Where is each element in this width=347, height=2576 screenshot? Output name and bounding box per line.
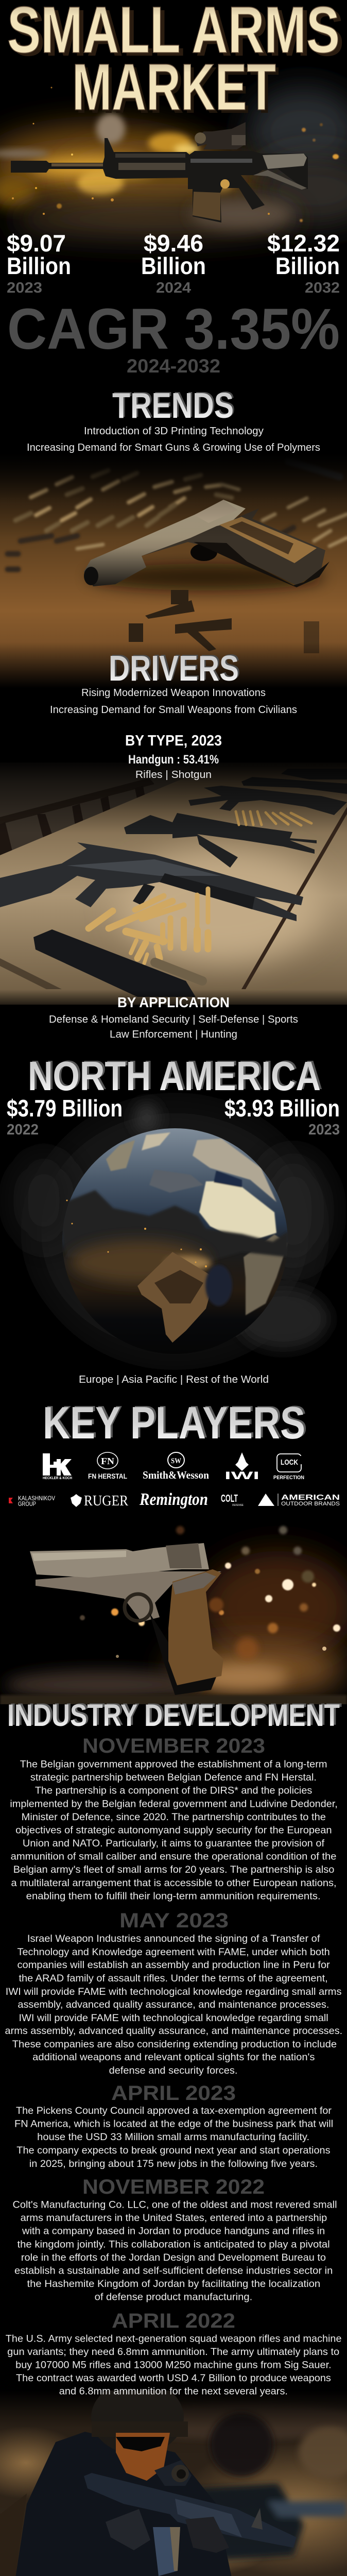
paragraph: implemented by the Belgian federal government and Ludivine Dedonder, — [10, 1798, 338, 1809]
by type scene: firearms on wooden table — [0, 757, 347, 1010]
April 2022 paragraph: buy 107000 M5 rifles and 13000 M250 machine guns from Sig Sauer. — [15, 2360, 332, 2371]
smoke backdrop — [13, 1103, 329, 1360]
development: May 2023: MAY 2023 — [119, 1909, 229, 1932]
paragraph: arms assembly, advanced quality assurance, and maintenance processes. — [5, 2025, 342, 2037]
sparks and bokeh — [12, 87, 339, 222]
far cartridges — [236, 811, 311, 825]
logo: Ruger: RUGER — [84, 1493, 128, 1509]
development: November 2023 — [10, 1735, 338, 1902]
warm glow and smoke — [0, 1551, 347, 1705]
title: MARKET — [72, 50, 276, 124]
smoke and fire glow — [0, 88, 347, 237]
paragraph: in 2025, bringing about 175 new jobs in the following five years. — [29, 2158, 318, 2170]
other regions: Europe | Asia Pacific | Rest of the World — [79, 1374, 269, 1385]
market size stat: 2024: Billion — [141, 252, 206, 279]
logo: Glock: LOCK — [281, 1458, 298, 1467]
heading: drivers: DRIVERS — [110, 647, 240, 687]
hero scene: rifle with muzzle blast — [0, 87, 347, 237]
by application block: Defense & Homeland Security | Self-Defense | Sports — [49, 1014, 298, 1025]
CAGR figure: 2024-2032 — [127, 355, 220, 377]
logo: IWI — [224, 1452, 259, 1482]
paragraph: of defense product manufacturing. — [95, 2292, 252, 2303]
paragraph: The partnership is a component of the DIRS* and the policies — [35, 1785, 313, 1797]
development: April 2023 — [14, 2082, 333, 2170]
paragraph: the ARAD family of assault rifles. Under the terms of the agreement, — [19, 1973, 328, 1984]
paragraph: Colt's Manufacturing Co. LLC, one of the oldest and most revered small — [12, 2199, 337, 2210]
logo: Smith and Wesson: SW — [171, 1457, 181, 1465]
paragraph: strategic partnership between Belgian Defence and FN Herstal. — [30, 1772, 317, 1783]
paragraph: Union and NATO. Particularly, it aims to guarantee the provision of — [23, 1838, 325, 1849]
April 2022 paragraph: The U.S. Army selected next-generation squad weapon rifles and machine — [6, 2333, 342, 2344]
embers — [66, 1199, 207, 1267]
logo: Glock — [273, 1454, 304, 1481]
pistol and sparks scene — [0, 1526, 347, 1705]
by application block — [0, 994, 347, 1046]
regional value 2022: 2022 — [7, 1122, 39, 1138]
logo: FN Herstal: FN HERSTAL — [88, 1472, 127, 1480]
paragraph: IWI will provide FAME with technological knowledge regarding small — [19, 2012, 328, 2024]
paragraph: the Hashemite Kingdom of Jordan by facilitating the localization — [27, 2278, 320, 2290]
development: November 2022: NOVEMBER 2022 — [82, 2176, 265, 2198]
paragraph: companies will establish an assembly and production line in Peru for — [18, 1959, 330, 1971]
drivers text: Rising Modernized Weapon Innovations — [81, 687, 266, 699]
trends scene: pistol and bullets on table — [0, 453, 347, 696]
paragraph: establish a sustainable and self-sufficient defense industries sector in — [14, 2265, 333, 2276]
paragraph: Israel Weapon Industries announced the signing of a Transfer of — [27, 1933, 320, 1944]
paragraph: These companies are also considering extending production to include — [12, 2039, 337, 2050]
heading: trends: TRENDS — [112, 385, 234, 426]
middle rifle — [124, 813, 317, 868]
regional value 2023 — [224, 1095, 340, 1138]
by type heading and values: Handgun : 53.41% — [128, 753, 219, 767]
paragraph: house the USD 33 Million small arms manufacturing facility. — [37, 2131, 309, 2143]
rifle — [11, 122, 308, 223]
soldier scene — [0, 2380, 347, 2576]
front rifle — [0, 842, 303, 921]
heading: trends: TRENDS — [114, 384, 235, 425]
April 2022 paragraph — [6, 2333, 342, 2397]
heading: drivers: DRIVERS — [109, 648, 239, 688]
market size stat: 2032: 2032 — [305, 280, 340, 296]
April 2022 paragraph: and 6.8mm ammunition for the next several years. — [59, 2385, 288, 2397]
logo: American Outdoor Brands: OUTDOOR BRANDS — [281, 1501, 340, 1507]
logo: Smith and Wesson — [143, 1452, 209, 1481]
April 2022 paragraph: The contract was awarded worth USD 4.7 Billion to produce weapons — [16, 2372, 331, 2384]
by application block: Law Enforcement | Hunting — [110, 1029, 237, 1040]
paragraph: defense and security forces. — [109, 2065, 237, 2076]
logo: Glock: PERFECTION — [273, 1475, 304, 1481]
market size stat: 2023 — [7, 230, 71, 296]
main soldier — [15, 2391, 232, 2576]
logo: American Outdoor Brands — [258, 1493, 340, 1507]
continents — [106, 1132, 288, 1315]
bokeh sparks — [80, 1526, 340, 1660]
top and bottom fade — [0, 757, 347, 1010]
paragraph: arms manufacturers in the United States, entered into a partnership — [21, 2212, 327, 2224]
logo: Heckler and Koch — [43, 1453, 72, 1480]
logo: FN Herstal: FN — [101, 1456, 114, 1466]
development: May 2023 — [5, 1909, 342, 2076]
trends text: Introduction of 3D Printing Technology — [84, 426, 264, 437]
table top — [0, 762, 347, 1005]
drivers text: Increasing Demand for Small Weapons from Civilians — [50, 704, 297, 716]
trends text — [27, 426, 320, 453]
logo: Smith and Wesson: Smith&Wesson — [143, 1469, 209, 1481]
paragraph: The Pickens County Council approved a tax-exemption agreement for — [16, 2105, 332, 2116]
April 2022 paragraph: gun variants; they need 6.8mm ammunition. The army ultimately plans to — [7, 2346, 339, 2358]
paragraph — [14, 2105, 333, 2170]
paragraph: The Belgian government approved the establishment of a long-term — [20, 1759, 327, 1770]
logo: Colt Defense: COLT — [221, 1493, 238, 1504]
market size stat: 2023: Billion — [7, 252, 71, 279]
background soldier — [196, 2413, 347, 2561]
paragraph: FN America, which is located at the edge of the business park that will — [14, 2119, 333, 2130]
regional value 2023: 2023 — [308, 1122, 340, 1138]
paragraph: a multilateral arrangement that is accessible to other European nations, — [11, 1877, 337, 1889]
magazine — [33, 929, 196, 997]
globe scene — [13, 1103, 329, 1360]
paragraph: objectives of strategic autonomyand supply security for the European — [15, 1825, 332, 1836]
far rifles — [188, 769, 347, 815]
logo: Kalashnikov: GROUP — [18, 1500, 36, 1507]
market size stat: 2032 — [267, 230, 340, 296]
regional value 2022: $3.79 Billion — [7, 1095, 123, 1122]
April 2022 heading: APRIL 2022 — [112, 2310, 235, 2332]
backdrop and railing — [0, 762, 347, 866]
paragraph: with a company based in Jordan to produce handguns and rifles in — [22, 2226, 325, 2237]
paragraph — [5, 1933, 342, 2076]
burning dark band — [57, 1190, 288, 1284]
title — [7, 0, 344, 127]
market size stat: 2024: 2024 — [156, 280, 191, 296]
logo: IWI: IWI — [224, 1470, 259, 1482]
paragraph: The company expects to break ground next year and start operations — [16, 2145, 331, 2156]
logo: Colt Defense: DEFENSE — [232, 1504, 244, 1507]
paragraph: Minister of Defence, since 2020. The partnership contributes to the — [22, 1811, 326, 1823]
globe body — [62, 1128, 288, 1354]
pistol — [30, 1543, 223, 1695]
company logos — [9, 1452, 340, 1509]
pistol — [84, 500, 329, 590]
paragraph: ammunition of small caliber and ensure the operational condition of the — [11, 1851, 336, 1862]
logo: Kalashnikov: KALASHNIKOV — [18, 1495, 55, 1502]
paragraph: enabling them to fulfill their long-term ammunition requirements. — [26, 1891, 321, 1902]
development: November 2023: NOVEMBER 2023 — [82, 1735, 265, 1757]
paragraph: role in the efforts of the Jordan Design and Development Bureau to — [21, 2252, 326, 2263]
logo: Kalashnikov — [9, 1495, 55, 1507]
logo: Heckler and Koch: HECKLER & KOCH — [43, 1476, 72, 1480]
market size stat: 2032: $12.32 — [267, 230, 340, 257]
paragraph: the kingdom jointly. This collaboration is anticipated to play a pivotal — [18, 2239, 330, 2250]
logo: Remington: Remington — [139, 1490, 208, 1509]
paragraph: Belgian army's fleet of small arms for 20 years. The partnership is also — [13, 1864, 335, 1875]
cartridge pile — [89, 889, 208, 981]
by type heading and values: Rifles | Shotgun — [135, 769, 212, 781]
paragraph: Technology and Knowledge agreement with FAME, under which both — [18, 1946, 330, 1958]
paragraph — [10, 1759, 338, 1902]
drivers text — [50, 687, 297, 716]
regional value 2022 — [7, 1095, 123, 1138]
development: April 2023: APRIL 2023 — [111, 2082, 236, 2105]
paragraph: additional weapons and relevant optical sights for the nation's — [32, 2052, 315, 2063]
lower continents — [137, 1252, 215, 1343]
blurred bullet pile — [8, 461, 347, 569]
rifle held by soldier — [84, 2473, 297, 2576]
market size stat: 2024: $9.46 — [144, 230, 203, 257]
market size stat: 2032: Billion — [275, 252, 340, 279]
paragraph — [12, 2199, 337, 2303]
scattered cartridges — [129, 590, 319, 653]
logo: FN Herstal — [88, 1452, 127, 1480]
trends text: Increasing Demand for Smart Guns & Growing Use of Polymers — [27, 442, 320, 453]
by type heading and values: BY TYPE, 2023 — [125, 733, 222, 749]
market size stat: 2024 — [141, 230, 206, 296]
CAGR figure: CAGR 3.35% — [7, 297, 340, 361]
paragraph: IWI will provide FAME with technological knowledge regarding small arms — [6, 1986, 342, 1997]
by application block: BY APPLICATION — [117, 994, 230, 1010]
paragraph: assembly, advanced quality assurance, and maintenance processes. — [18, 1999, 329, 2010]
market size stat: 2023: 2023 — [7, 280, 42, 296]
market size stat: 2023: $9.07 — [7, 230, 66, 257]
development: November 2022 — [12, 2176, 337, 2303]
blurred desert backdrop — [0, 2391, 347, 2576]
by type heading and values — [125, 733, 222, 781]
logo: American Outdoor Brands: AMERICAN — [281, 1493, 340, 1502]
